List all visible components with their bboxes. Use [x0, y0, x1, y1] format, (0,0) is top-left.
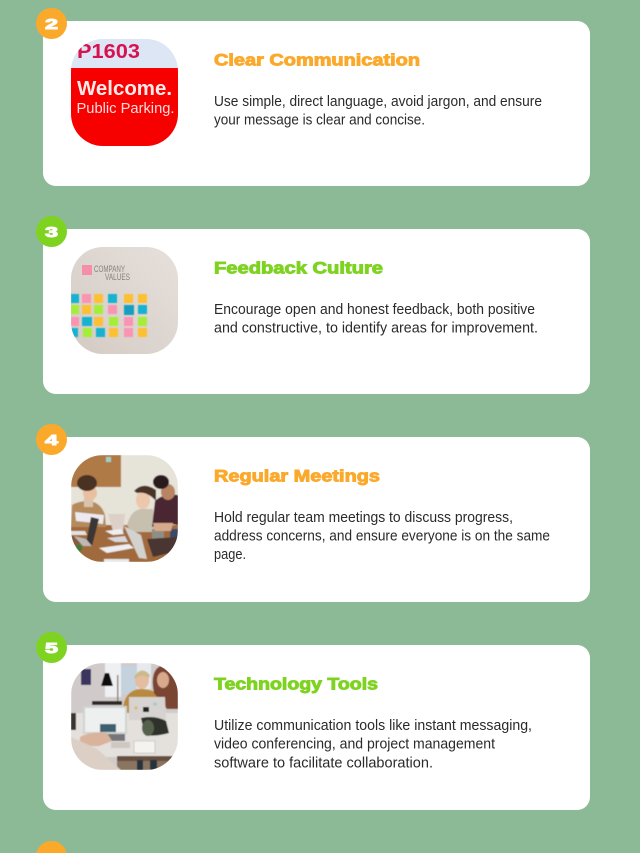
- photo: parking sign: P1603: [77, 41, 140, 63]
- heading: Regular Meetings: [214, 468, 380, 486]
- card background: [43, 437, 590, 602]
- photo: sticky notes wall: COMPANY: [94, 264, 125, 274]
- body text: [214, 94, 542, 128]
- panel: feedback culture: [43, 229, 590, 394]
- body text: your message is clear and concise.: [214, 112, 425, 128]
- photo: sticky notes wall: [71, 247, 178, 354]
- heading: Technology Tools: [214, 676, 378, 694]
- badge: 3: [36, 216, 67, 247]
- badge: 5: [36, 632, 67, 663]
- card background: [43, 21, 590, 186]
- panel: regular meetings: [43, 437, 590, 602]
- photo: colleagues with laptops: [71, 663, 178, 770]
- badge: 3: 3: [45, 224, 58, 241]
- body text: software to facilitate collaboration.: [214, 756, 433, 772]
- card background: [43, 645, 590, 810]
- body text: video conferencing, and project management: [214, 736, 495, 752]
- body text: page.: [214, 547, 246, 563]
- badge: 4: [36, 424, 67, 455]
- photo: parking sign: Public Parking.: [76, 100, 174, 117]
- panel: technology tools: [43, 645, 590, 810]
- badge: 4: 4: [45, 432, 59, 449]
- body text: Utilize communication tools like instant messaging,: [214, 718, 532, 734]
- photo: parking sign: [71, 39, 178, 146]
- badge: 6 (cropped at the bottom edge): [36, 841, 67, 853]
- photo: parking sign: Welcome.: [77, 77, 172, 100]
- body text: Use simple, direct language, avoid jargon, and ensure: [214, 94, 542, 110]
- body text: Hold regular team meetings to discuss progress,: [214, 510, 513, 526]
- heading: Feedback Culture: [214, 260, 383, 278]
- panel: clear communication: [43, 21, 590, 186]
- body text: [214, 302, 538, 336]
- photo: team at a table: [71, 455, 178, 562]
- body text: [214, 510, 550, 563]
- badge: 5: 5: [45, 640, 58, 657]
- body text: address concerns, and ensure everyone is on the same: [214, 528, 550, 544]
- card background: [43, 229, 590, 394]
- badge: 2: 2: [45, 16, 58, 33]
- body text: Encourage open and honest feedback, both positive: [214, 302, 535, 318]
- body text: [214, 718, 532, 772]
- heading: Clear Communication: [214, 52, 420, 70]
- body text: and constructive, to identify areas for improvement.: [214, 320, 538, 336]
- photo: sticky notes wall: VALUES: [105, 272, 130, 282]
- badge: 2: [36, 8, 67, 39]
